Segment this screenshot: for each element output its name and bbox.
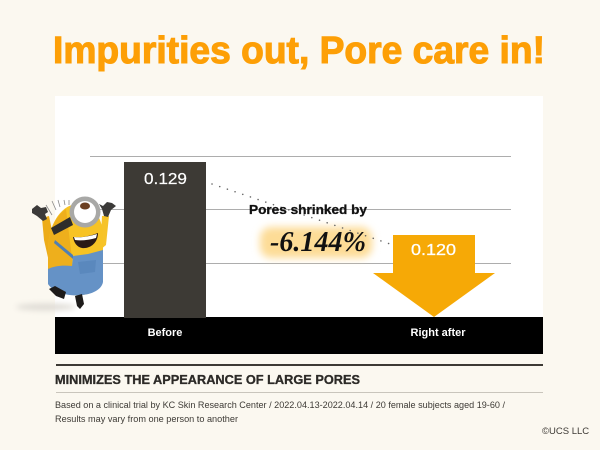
callout: pores shrinked [212, 184, 396, 258]
footnote: Results may vary from one person to another [55, 414, 238, 424]
hair [46, 200, 69, 215]
footnote [55, 400, 505, 424]
goggle [70, 196, 100, 228]
arrow: right after: 0.120 [411, 242, 456, 259]
body [48, 204, 103, 295]
axis band [55, 317, 543, 354]
feet [49, 286, 66, 299]
heading: minimizes: MINIMIZES THE APPEARANCE OF LARGE PORES [55, 373, 360, 387]
overalls [48, 250, 103, 295]
arms [42, 216, 54, 262]
goggle strap [51, 217, 73, 235]
arrow: right after [373, 235, 495, 317]
divider bottom [56, 392, 543, 393]
callout: pores shrinked: -6.144% [270, 227, 366, 258]
footnote: Based on a clinical trial by KC Skin Research Center / 2022.04.13-2022.04.14 / 20 female subjects aged 19-60 / [55, 400, 505, 410]
mouth [73, 233, 98, 248]
callout: pores shrinked: Pores shrinked by [249, 202, 368, 217]
copyright: ©UCS LLC [542, 426, 589, 437]
panel: chart [55, 96, 543, 354]
label: right after: Right after [410, 327, 466, 339]
label: before: Before [148, 327, 182, 339]
hands [32, 205, 48, 221]
bar: before: 0.129 [144, 171, 187, 188]
title: Impurities out, Pore care in! [53, 30, 545, 72]
divider top [56, 364, 543, 366]
icon: minion [16, 196, 116, 310]
bar: before [124, 162, 206, 318]
grid lines [90, 156, 511, 264]
